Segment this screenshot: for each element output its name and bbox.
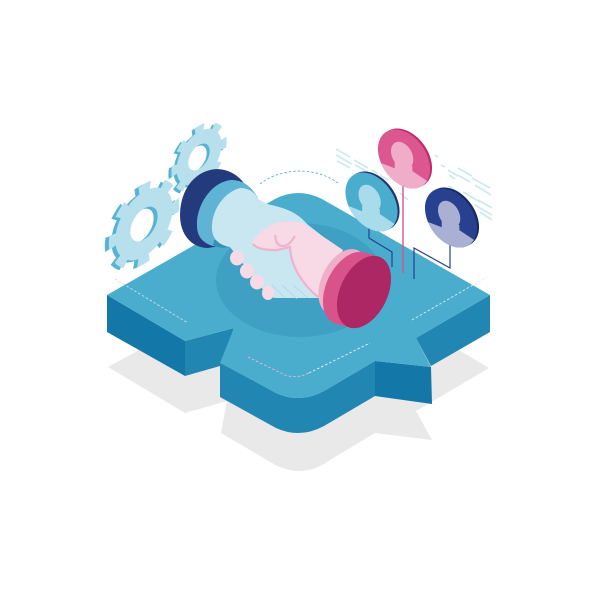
decorative data streaks — [336, 149, 492, 220]
platform shadow — [108, 333, 489, 471]
pink sleeve cuff — [318, 236, 391, 343]
pink hand — [252, 222, 343, 297]
person disc: pink — [378, 128, 432, 188]
person disc: navy — [424, 188, 480, 248]
platform — [107, 171, 490, 433]
icon: small gear — [171, 115, 224, 201]
fingers — [230, 250, 274, 300]
blue hand — [212, 188, 340, 299]
infographic: isometric handshake on a platform — [104, 122, 492, 471]
platform side faces — [107, 295, 490, 433]
blue sleeve cuff — [180, 169, 258, 248]
platform top face — [107, 193, 490, 398]
connector wires — [369, 185, 450, 279]
person disc: blue — [345, 172, 400, 232]
dashed guide lines — [115, 171, 487, 377]
platform ellipse shade — [216, 223, 384, 337]
handshake — [180, 169, 391, 343]
icon: large gear — [108, 170, 176, 280]
